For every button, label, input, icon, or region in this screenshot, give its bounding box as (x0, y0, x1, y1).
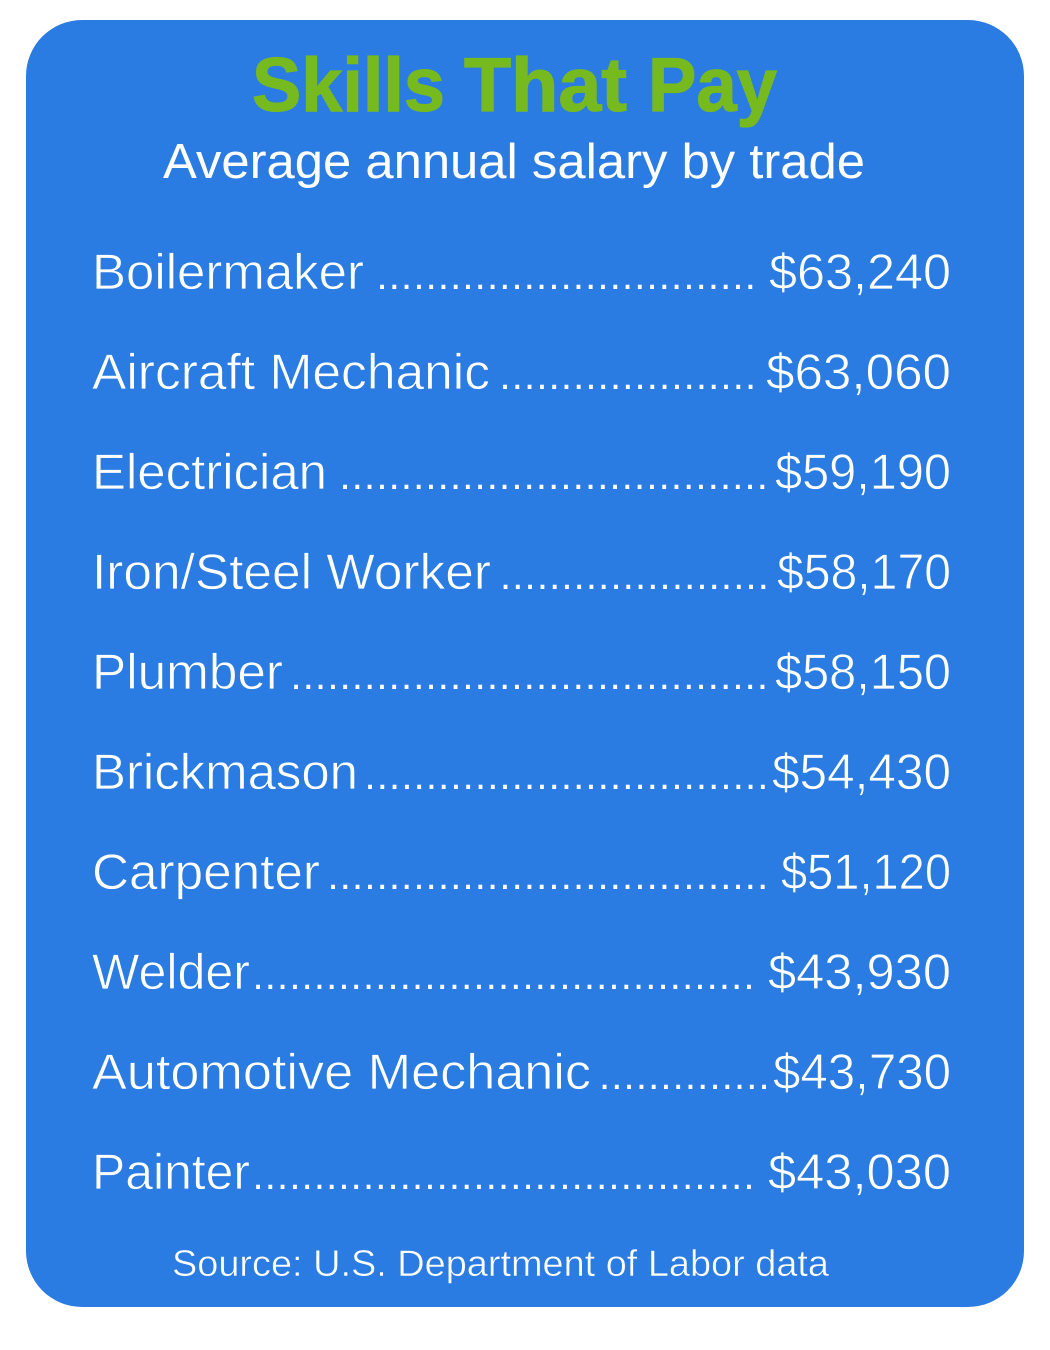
row: Electrician (92, 444, 951, 500)
row: Brickmason: Brickmason (92, 744, 358, 800)
row: Brickmason: ................................. (364, 754, 770, 798)
row: Brickmason (92, 744, 951, 800)
row: Iron/Steel Worker: Iron/Steel Worker (92, 544, 491, 600)
title: That (464, 43, 627, 128)
row: Automotive Mechanic: .............. (599, 1054, 771, 1098)
row: Boilermaker: $63,240 (769, 244, 951, 300)
row: Iron/Steel Worker: $58,170 (777, 544, 951, 600)
row: Plumber: Plumber (92, 644, 283, 700)
row: Carpenter: .................................... (328, 854, 769, 898)
title: Pay (648, 43, 777, 128)
row: Aircraft Mechanic: $63,060 (766, 344, 951, 400)
row: Brickmason: $54,430 (772, 744, 951, 800)
row: Electrician: $59,190 (775, 444, 951, 500)
row: Welder (92, 944, 951, 1000)
row: Aircraft Mechanic: Aircraft Mechanic (92, 344, 490, 400)
row: Welder: ......................................... (252, 954, 756, 998)
row: Electrician: ................................... (340, 454, 769, 498)
row: Carpenter: $51,120 (781, 844, 951, 900)
row: Carpenter: Carpenter (92, 844, 320, 900)
source note: Source: U.S. Department of Labor data (172, 1243, 829, 1284)
row: Painter: Painter (92, 1144, 250, 1200)
row: Carpenter (92, 844, 951, 900)
row: Plumber (92, 644, 951, 700)
row: Automotive Mechanic (92, 1044, 951, 1100)
salary list (92, 244, 951, 1200)
row: Plumber: $58,150 (775, 644, 951, 700)
row: Electrician: Electrician (92, 444, 327, 500)
row: Painter: $43,030 (768, 1144, 951, 1200)
row: Boilermaker: Boilermaker (92, 244, 364, 300)
row: Welder: $43,930 (768, 944, 951, 1000)
row: Boilermaker (92, 244, 951, 300)
row: Welder: Welder (92, 944, 250, 1000)
title: Skills (252, 43, 445, 128)
row: Painter: ......................................... (252, 1154, 756, 1198)
row: Aircraft Mechanic: ..................... (500, 354, 757, 398)
row: Aircraft Mechanic (92, 344, 951, 400)
title (252, 43, 777, 128)
row: Automotive Mechanic: Automotive Mechanic (92, 1044, 591, 1100)
row: Iron/Steel Worker: ...................... (500, 554, 770, 598)
row: Automotive Mechanic: $43,730 (773, 1044, 951, 1100)
row: Iron/Steel Worker (92, 544, 951, 600)
row: Plumber: ....................................... (290, 654, 769, 698)
subtitle: Average annual salary by trade (163, 135, 865, 189)
row: Painter (92, 1144, 951, 1200)
row: Boilermaker: ............................... (376, 254, 757, 298)
